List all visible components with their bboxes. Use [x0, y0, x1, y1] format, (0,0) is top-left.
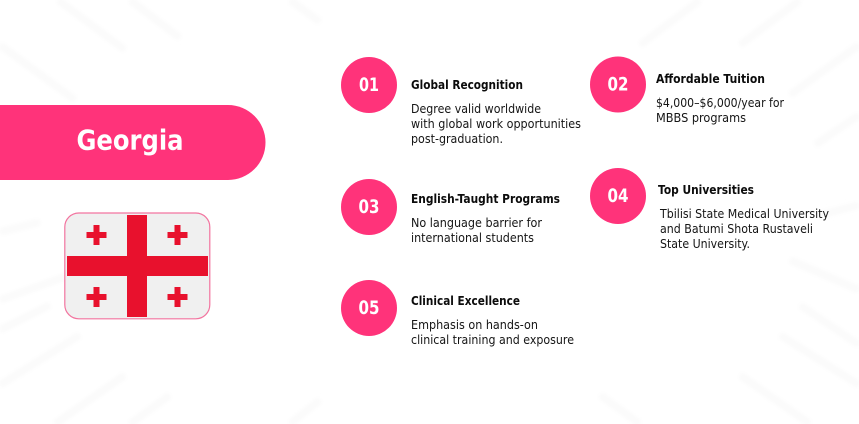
item 01: Global Recognition: Global Recognition [411, 77, 523, 92]
item 04: Top Universities: Top Universities [658, 182, 754, 197]
item 04: Top Universities: Tbilisi State Medical University [659, 207, 829, 221]
item 03: English-Taught Programs: 03 [358, 197, 380, 218]
item 04: Top Universities: and Batumi Shota Rustaveli [660, 222, 813, 236]
item 05: Clinical Excellence: Emphasis on hands-on [411, 318, 538, 332]
item 03: English-Taught Programs: English-Taught Programs [411, 191, 560, 206]
item 02: Affordable Tuition: 02 [608, 74, 628, 96]
item 03: English-Taught Programs: international students [411, 231, 534, 245]
banner: Georgia: Georgia [76, 124, 184, 156]
item 05: Clinical Excellence: clinical training and exposure [411, 333, 574, 347]
item 02: Affordable Tuition: MBBS programs [656, 111, 746, 125]
item 02: Affordable Tuition: $4,000–$6,000/year for [656, 96, 785, 110]
icon: flag of Georgia [65, 213, 210, 319]
item 05: Clinical Excellence [341, 280, 574, 347]
item 01: Global Recognition: post-graduation. [411, 132, 503, 146]
item 01: Global Recognition: 01 [359, 75, 379, 96]
item 05: Clinical Excellence: 05 [358, 298, 380, 319]
item 05: Clinical Excellence: Clinical Excellence [411, 293, 520, 308]
item 02: Affordable Tuition: Affordable Tuition [656, 71, 765, 86]
item 01: Global Recognition: with global work opportunities [411, 117, 581, 131]
item 04: Top Universities [590, 168, 829, 251]
item 01: Global Recognition: Degree valid worldwide [411, 102, 541, 116]
item 01: Global Recognition [341, 57, 581, 146]
item 03: English-Taught Programs [341, 179, 560, 245]
item 03: English-Taught Programs: No language barrier for [411, 216, 543, 230]
item 02: Affordable Tuition [590, 56, 785, 125]
item 04: Top Universities: 04 [608, 186, 629, 207]
item 04: Top Universities: State University. [660, 237, 750, 251]
banner: Georgia [0, 105, 266, 180]
